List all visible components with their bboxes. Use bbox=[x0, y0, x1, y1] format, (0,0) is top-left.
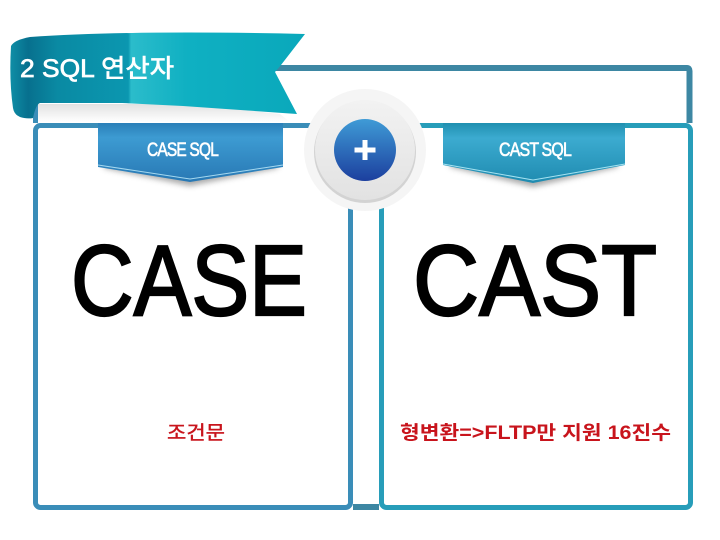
text: 형변환 FLTP: 형변환=>FLTP만 지원 16진수 bbox=[400, 422, 671, 444]
ribbon title banner bbox=[10, 33, 305, 123]
bottom connector bbox=[353, 504, 379, 510]
badge: CASE SQL bbox=[98, 123, 283, 186]
title text: 2 SQL 연산자 bbox=[20, 55, 174, 83]
badge: CAST SQL bbox=[443, 123, 625, 187]
text: 조건문: 조건문 bbox=[167, 422, 225, 444]
badge label: CASE SQL bbox=[147, 140, 218, 161]
top frame line bbox=[275, 68, 690, 123]
heading: CASE: CASE bbox=[71, 225, 307, 337]
badge label: CAST SQL bbox=[499, 140, 571, 161]
icon: plus button bbox=[304, 89, 426, 211]
heading: CAST: CAST bbox=[413, 225, 657, 337]
